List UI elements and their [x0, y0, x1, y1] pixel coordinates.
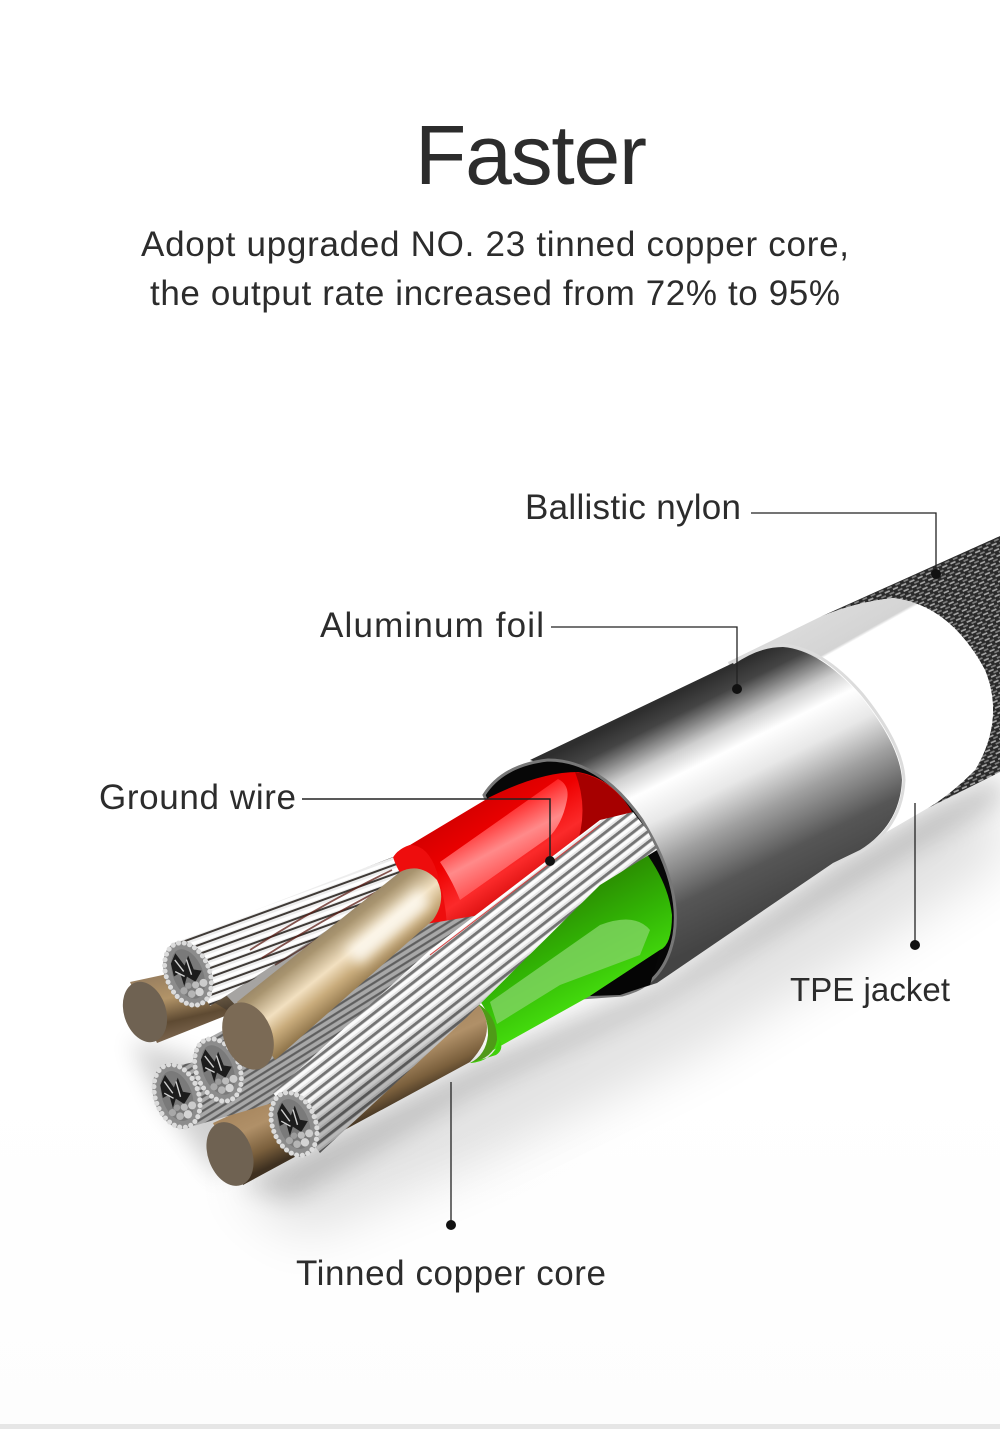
label: TPE jacket: [790, 803, 950, 1008]
label: Ballistic nylon: Ballistic nylon: [525, 488, 741, 527]
aluminum foil: [484, 645, 904, 998]
cable illustration: [115, 536, 1000, 1193]
ballistic nylon braid: [820, 536, 1000, 808]
subtitle: the output rate increased from 72% to 95%: [150, 274, 840, 313]
large bare copper wire: [213, 868, 441, 1077]
main silver strand bundle: [261, 812, 657, 1164]
title: Faster: [415, 108, 647, 202]
label: Ground wire: Ground wire: [99, 778, 296, 817]
label: Aluminum foil: [320, 606, 742, 694]
back left copper wire: [115, 967, 240, 1048]
label: Aluminum foil: Aluminum foil: [320, 606, 544, 645]
label: Tinned copper core: Tinned copper core: [296, 1254, 606, 1293]
bottom copper wire: [198, 1003, 487, 1193]
foil opening: [484, 760, 675, 998]
label: Tinned copper core: [296, 1082, 606, 1293]
subtitle: Adopt upgraded NO. 23 tinned copper core,: [141, 225, 849, 264]
TPE jacket: [728, 598, 993, 863]
label: TPE jacket: TPE jacket: [790, 971, 950, 1008]
green insulated wire: [470, 845, 672, 1063]
cable shadow: [130, 775, 1000, 1235]
label: Ground wire: [99, 778, 555, 866]
small silver strand bundles: [144, 915, 480, 1136]
label: Ballistic nylon: [525, 488, 941, 579]
red insulated wire: [391, 772, 632, 934]
top left silver strand bundle: [154, 857, 425, 1015]
subtitle: [141, 225, 849, 313]
